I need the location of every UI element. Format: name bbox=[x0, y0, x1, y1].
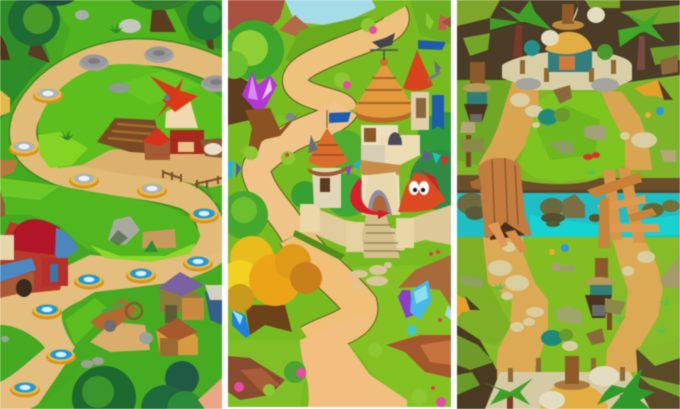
castle steps bbox=[362, 215, 400, 258]
signpost left bbox=[460, 135, 484, 167]
main tower bbox=[360, 125, 420, 215]
panel: castle level map bbox=[227, 0, 452, 408]
castle wall bbox=[293, 204, 451, 260]
water and cliffs bbox=[228, 0, 376, 38]
main tower roof bbox=[353, 58, 415, 123]
bottom grass bbox=[30, 262, 222, 409]
tree top right bbox=[187, 0, 227, 50]
panel: tribal jungle level map bbox=[457, 0, 680, 409]
golden tree bbox=[220, 236, 322, 335]
crates bbox=[553, 55, 678, 345]
river rocks bbox=[457, 193, 680, 227]
boulder and dirt patch bbox=[108, 216, 176, 252]
totem lower bbox=[585, 258, 626, 330]
trees bottom bbox=[72, 361, 222, 409]
dirt path edge bbox=[256, 12, 397, 342]
left tower bbox=[307, 110, 348, 208]
stepping stones bbox=[350, 262, 392, 289]
rocks lower right bbox=[386, 255, 451, 378]
blue crystal left bbox=[232, 310, 250, 338]
wagon bbox=[90, 298, 142, 332]
game tokens: blue bbox=[10, 208, 219, 398]
grass tones bbox=[286, 0, 450, 406]
right tower bbox=[403, 50, 441, 130]
red flowers bbox=[285, 153, 442, 390]
blue flags bbox=[329, 40, 446, 130]
green tree bbox=[220, 20, 284, 125]
right green corner bbox=[208, 185, 222, 205]
green gem and rock top right bbox=[426, 12, 451, 30]
middle grass dome bbox=[518, 92, 625, 182]
dark cliffs top bbox=[457, 0, 680, 82]
river bbox=[457, 193, 680, 240]
pink flowers bbox=[234, 26, 446, 407]
bunting bbox=[344, 150, 450, 176]
yellow tent top right bbox=[634, 80, 673, 100]
bottom right ledge bbox=[636, 340, 680, 409]
castle background foliage bbox=[290, 112, 452, 218]
barn bbox=[0, 219, 78, 298]
plank bridge bbox=[587, 168, 660, 248]
cliff band bbox=[457, 175, 680, 198]
tent lower left bbox=[457, 295, 480, 318]
lower island bbox=[2, 186, 201, 257]
upper grass bbox=[457, 80, 518, 175]
farm house bbox=[142, 128, 222, 160]
tall shed bbox=[158, 272, 204, 323]
upper rocks bbox=[460, 122, 676, 162]
weather vane bbox=[370, 33, 398, 60]
left edge hut bbox=[0, 90, 18, 218]
rocks lower bbox=[1, 332, 153, 368]
teal bush bbox=[538, 108, 570, 125]
lower grass bbox=[457, 237, 680, 409]
palm right bbox=[618, 10, 665, 70]
rocks top bbox=[75, 10, 141, 93]
game tokens: locked bbox=[79, 46, 231, 92]
hut side plants and posts bbox=[515, 40, 619, 92]
plowed field bbox=[97, 118, 162, 154]
fence bbox=[163, 170, 222, 188]
small crystals left bbox=[228, 160, 241, 178]
upper stepping stones bbox=[510, 93, 657, 148]
lower dirt paths bbox=[483, 237, 663, 380]
dirt path edge bbox=[8, 38, 222, 229]
brown rocks lower left bbox=[228, 356, 285, 400]
leafy plants bbox=[244, 18, 446, 405]
broken tree bridge bbox=[470, 158, 532, 253]
red mushrooms bbox=[583, 152, 600, 160]
panel: farm level map bbox=[0, 0, 240, 409]
grass tufts bbox=[491, 166, 673, 333]
side building right bbox=[205, 285, 222, 325]
animal skulls top bbox=[541, 7, 605, 46]
windmill bbox=[150, 76, 198, 128]
bottom hut bbox=[485, 356, 650, 409]
teal bush bottom bbox=[541, 329, 578, 351]
lower stepping stones bbox=[488, 242, 655, 332]
palm left bbox=[490, 0, 552, 57]
inner island bbox=[38, 64, 222, 168]
tree top left bbox=[8, 0, 60, 63]
totem upper left bbox=[463, 62, 491, 122]
tree stump bbox=[245, 108, 300, 152]
bush lower left bbox=[220, 191, 268, 239]
bottom palms bbox=[482, 368, 655, 409]
gem cluster bbox=[398, 280, 432, 335]
tree top centre bbox=[130, 0, 190, 32]
dirt path bbox=[23, 52, 240, 270]
upper dirt paths bbox=[478, 82, 652, 170]
small shed bbox=[156, 318, 198, 356]
purple crystal bbox=[242, 72, 277, 110]
tribal hut bbox=[502, 0, 632, 90]
blue and yellow gems bbox=[549, 107, 664, 255]
game tokens: silver bbox=[9, 88, 167, 198]
meadow upper bbox=[57, 0, 189, 58]
grass tufts bbox=[60, 24, 123, 140]
dragon bbox=[350, 168, 446, 219]
dirt path bbox=[256, 12, 397, 342]
bottom left cliff bbox=[457, 325, 497, 409]
lower rocks bbox=[460, 255, 680, 325]
